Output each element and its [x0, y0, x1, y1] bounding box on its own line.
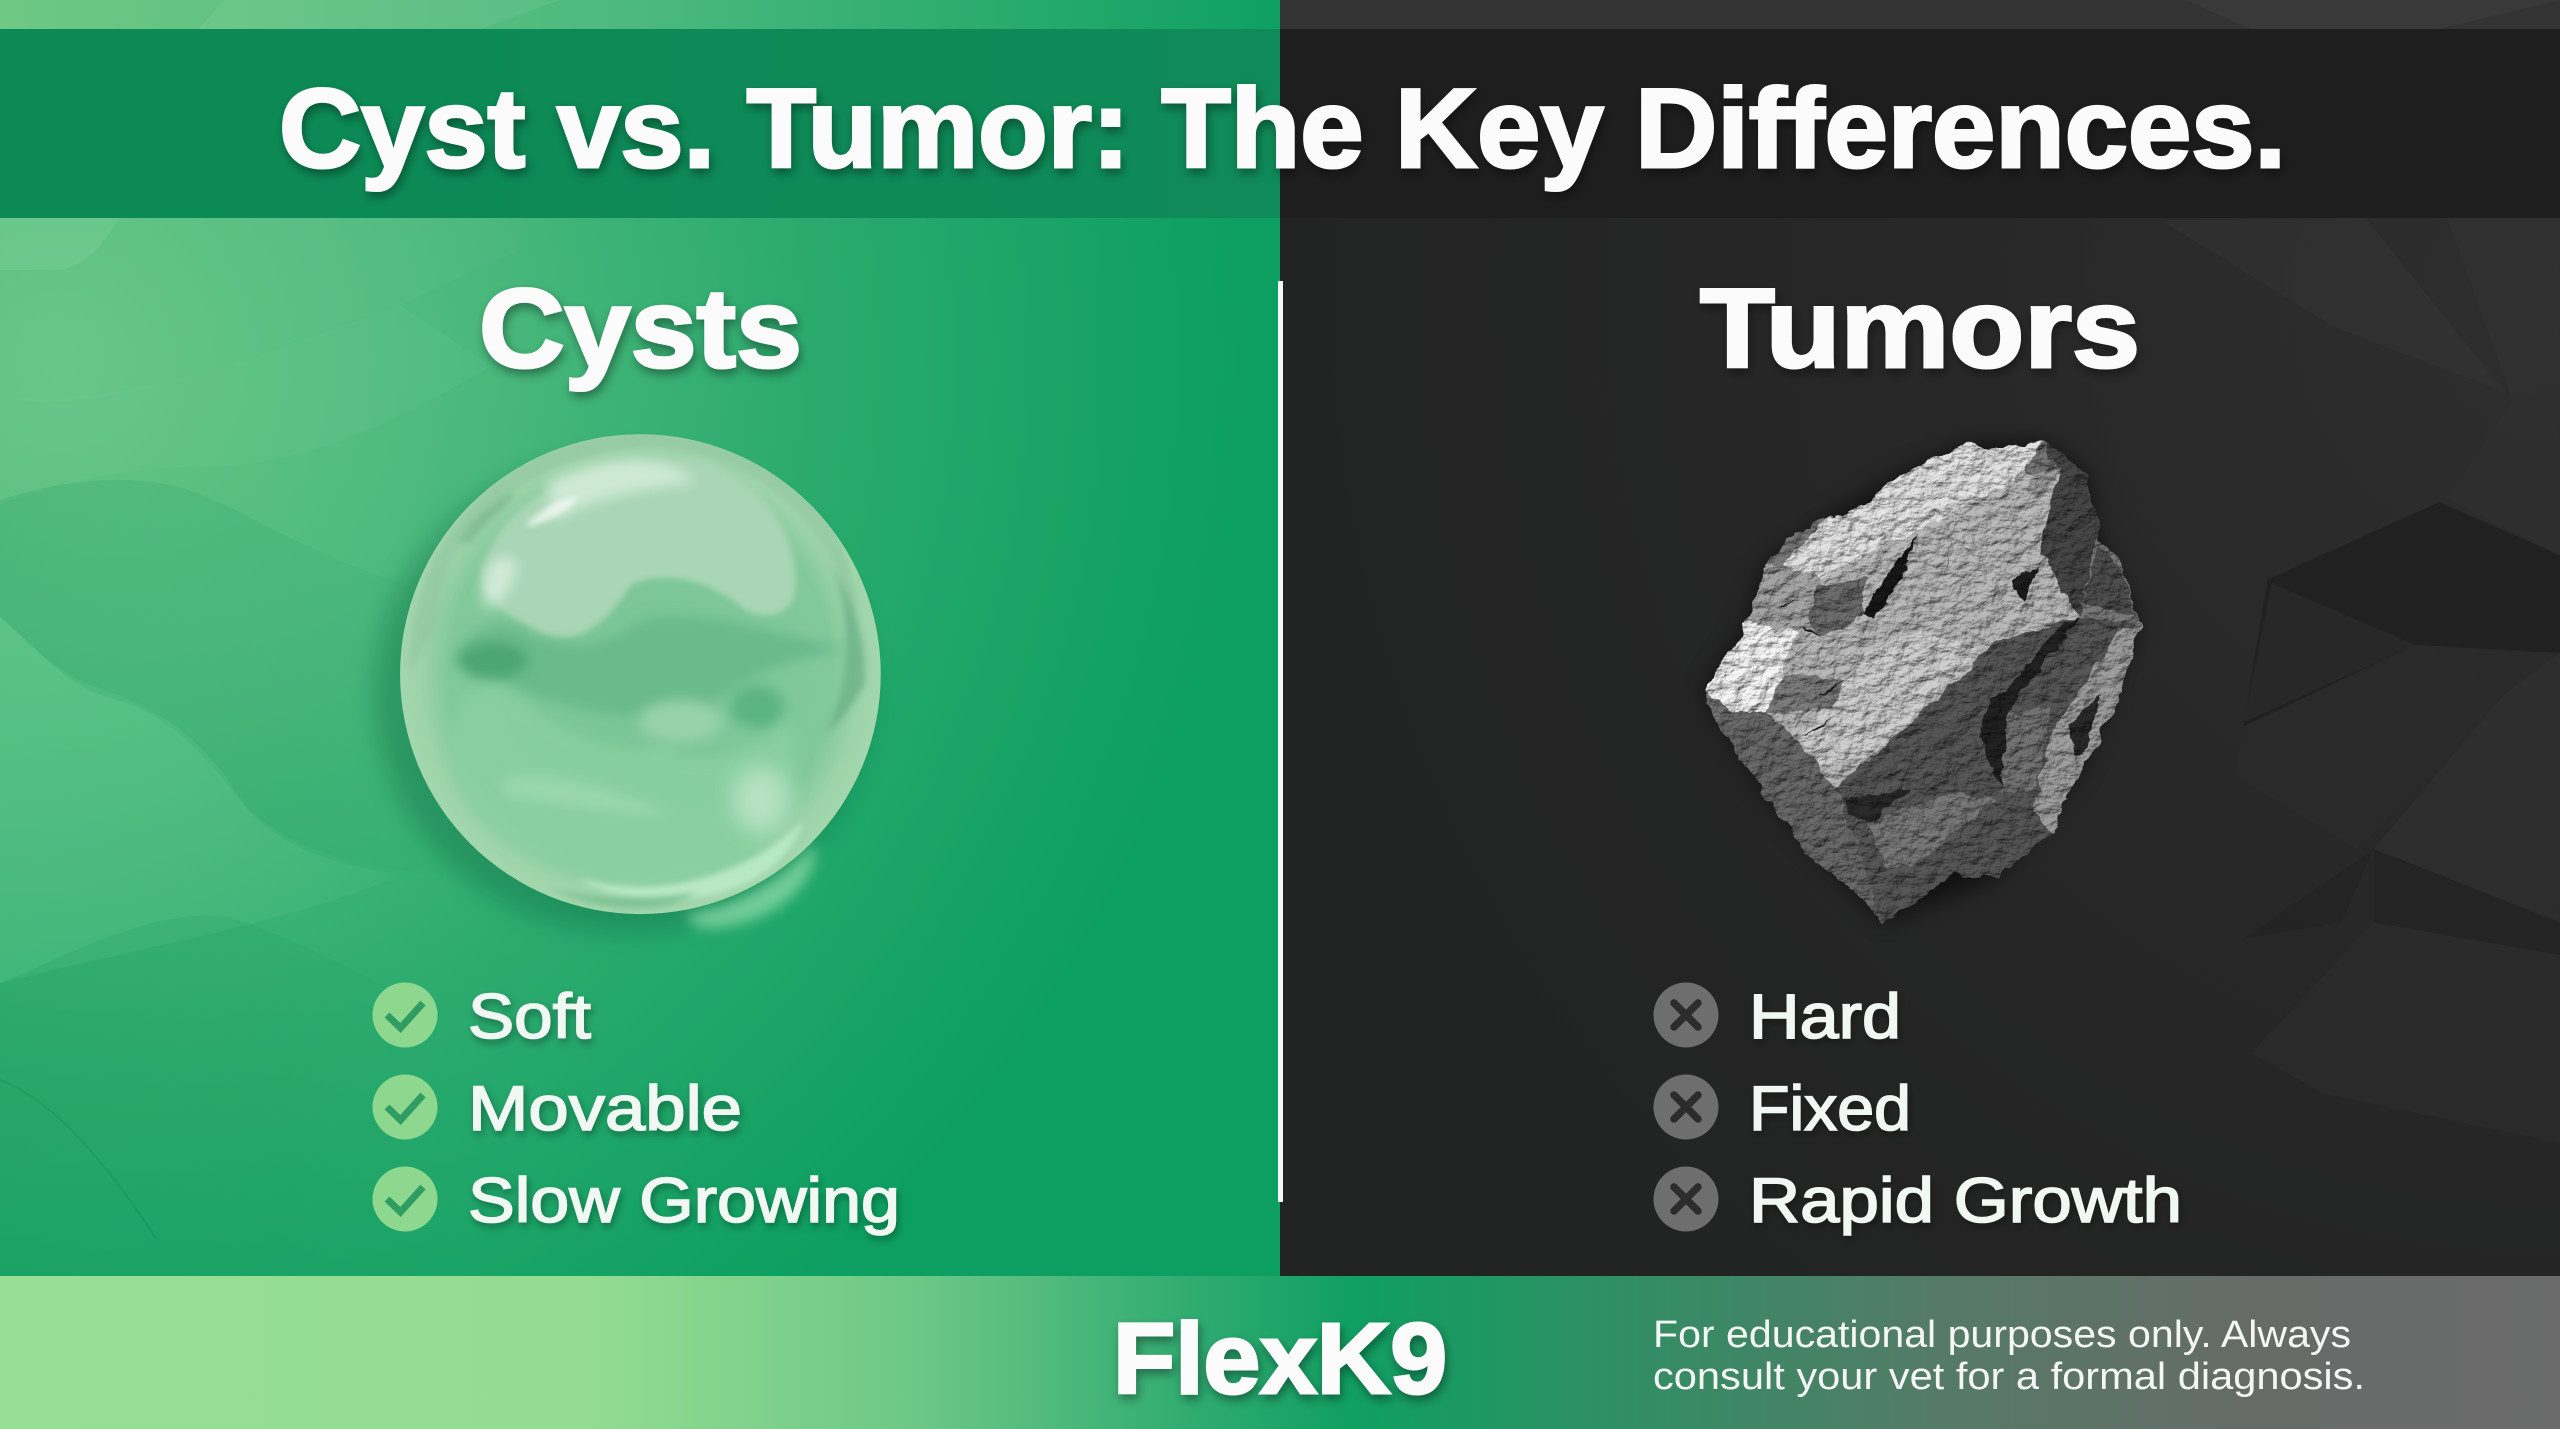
footer bar — [0, 1276, 2560, 1429]
list: tumor traits — [1654, 982, 2182, 1236]
item: hard — [1654, 982, 1901, 1052]
item: soft: Soft — [468, 982, 592, 1052]
disclaimer — [1653, 1314, 2365, 1398]
item: fixed: Fixed — [1749, 1074, 1911, 1144]
item: movable — [372, 1074, 742, 1144]
icon: liquid cyst bubble — [374, 431, 881, 932]
item: slow growing: Slow Growing — [468, 1166, 900, 1236]
item: hard: Hard — [1749, 982, 1901, 1052]
center divider — [1278, 281, 1283, 1202]
list: cyst traits — [372, 982, 900, 1236]
disclaimer: For educational purposes only. Always — [1653, 1314, 2351, 1356]
item: rapid growth: Rapid Growth — [1749, 1166, 2182, 1236]
item: fixed — [1654, 1074, 1911, 1144]
panel: cysts background — [0, 0, 1280, 1276]
title band — [0, 29, 2560, 218]
brand: FlexK9: FlexK9 — [1113, 1303, 1447, 1415]
panel: tumors background — [1280, 0, 2560, 1276]
title: Cyst vs. Tumor: The Key Differences. — [279, 66, 2286, 191]
item: soft — [372, 982, 592, 1052]
heading: cysts: Cysts — [479, 266, 802, 391]
item: movable: Movable — [468, 1074, 742, 1144]
disclaimer: consult your vet for a formal diagnosis. — [1653, 1356, 2365, 1398]
icon: rough tumor rock — [1702, 441, 2140, 923]
heading: tumors: Tumors — [1700, 266, 2140, 391]
